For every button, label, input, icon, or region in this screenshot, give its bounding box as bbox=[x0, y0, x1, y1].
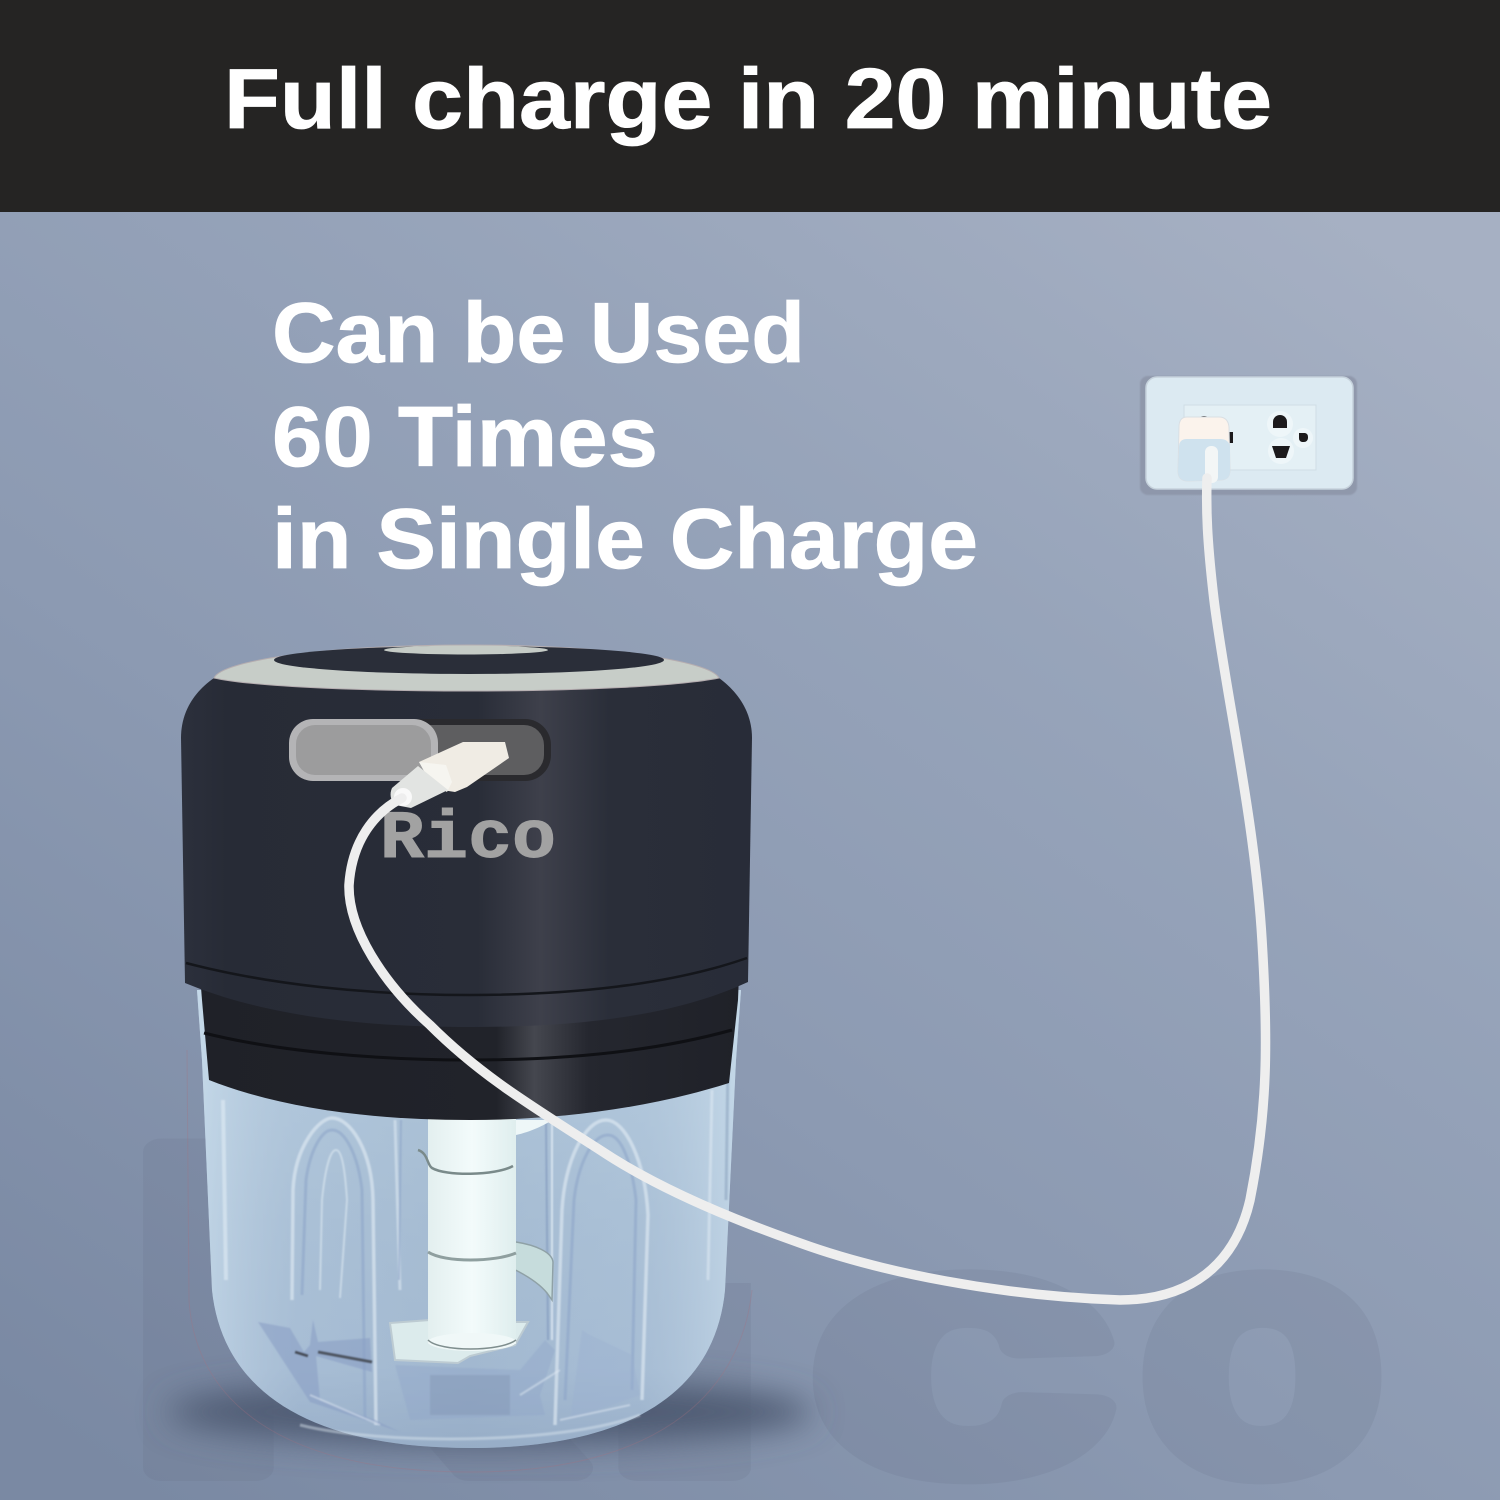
heading: usage: 60 Times bbox=[272, 390, 658, 485]
upper blade bbox=[480, 1242, 553, 1300]
glass jar bbox=[197, 990, 741, 1448]
header band bbox=[0, 0, 1500, 212]
jar base detail bbox=[258, 1320, 640, 1439]
jar ribs and arches bbox=[223, 1060, 728, 1425]
charging cable bbox=[349, 478, 1266, 1300]
central shaft bbox=[418, 1118, 552, 1351]
heading: usage: in Single Charge bbox=[272, 492, 978, 587]
base blade bbox=[390, 1320, 528, 1363]
lid ring bbox=[214, 645, 719, 691]
collar seam bbox=[204, 1030, 732, 1060]
charger plug bbox=[1178, 417, 1230, 483]
socket holes bbox=[1200, 415, 1308, 458]
usb connector bbox=[391, 742, 509, 808]
wall outlet bbox=[1140, 376, 1357, 495]
watermark logo bbox=[118, 1053, 1382, 1500]
lower collar bbox=[200, 975, 739, 1120]
heading: usage bbox=[272, 286, 978, 587]
heading: usage: Can be Used bbox=[272, 286, 805, 381]
floor shadow bbox=[168, 1379, 812, 1445]
guide outline bbox=[187, 1050, 752, 1472]
title: Full charge in 20 minute bbox=[224, 52, 1272, 147]
cap body bbox=[181, 678, 752, 1027]
charging port bbox=[289, 719, 551, 781]
socket recesses bbox=[1267, 411, 1313, 464]
logo: Rico bbox=[380, 801, 556, 878]
chopper bbox=[181, 645, 752, 1448]
